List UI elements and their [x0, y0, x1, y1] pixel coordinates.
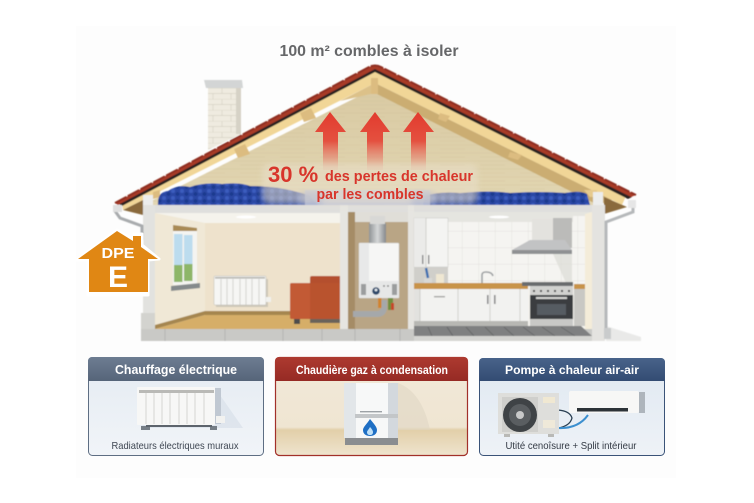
panel header [479, 358, 665, 381]
heat arrows [315, 112, 434, 170]
rafter brackets [371, 78, 378, 94]
gutter right [606, 208, 633, 330]
insulation [158, 183, 590, 205]
base cabinets [414, 289, 528, 326]
soffits [123, 200, 143, 215]
panel: pompe à chaleur air-air [479, 358, 665, 456]
red tiles [115, 66, 636, 205]
DPE badge: E [108, 261, 128, 294]
panel: chaudière gaz à condensation: Chaudière gaz à condensation [296, 365, 448, 377]
gutter left [115, 211, 142, 240]
panel: chauffage électrique: Chauffage électrique [115, 363, 237, 377]
boiler closet [348, 205, 414, 329]
DPE badge: DPE [102, 246, 135, 262]
roof structure [115, 66, 636, 215]
counter [414, 283, 528, 289]
living room [155, 213, 341, 329]
wood fascia [122, 71, 626, 210]
window [171, 225, 200, 291]
caption: Radiateurs électriques muraux [112, 440, 239, 452]
wall cabinets [414, 218, 448, 267]
panel: chauffage électrique [88, 357, 264, 456]
icon: radiator [137, 387, 243, 430]
pipes [352, 298, 394, 314]
icon: boiler with flame [344, 383, 430, 445]
walls and slabs [143, 195, 153, 205]
DPE badge [77, 230, 159, 295]
panel header [275, 357, 468, 381]
house illustration [113, 66, 641, 341]
floor [155, 315, 341, 329]
baseboard [155, 311, 341, 329]
chimney [204, 80, 243, 150]
boiler [359, 243, 399, 298]
stove [522, 282, 573, 326]
flue [369, 223, 386, 245]
panel header [88, 357, 264, 381]
heat loss label [262, 162, 478, 204]
caption: Utité cenoîsure + Split intérieur [506, 440, 637, 452]
dark underlay [119, 68, 632, 206]
floor [414, 326, 592, 336]
title: 100 m² combles à isoler [280, 43, 458, 60]
hood [512, 218, 572, 283]
partition wall [340, 205, 348, 329]
panel: chaudière gaz à condensation [275, 357, 468, 456]
gable wall [153, 88, 595, 205]
heat loss label: par les combles [316, 187, 424, 203]
heat loss label: des pertes de chaleur [325, 169, 473, 185]
radiator [214, 276, 271, 307]
panel: pompe à chaleur air-air: Pompe à chaleur air-air [505, 363, 639, 377]
kitchen [414, 212, 592, 341]
icon: outdoor unit and split [498, 391, 645, 437]
sink [424, 268, 493, 284]
sofa [290, 276, 341, 324]
heat loss label: 30 % [268, 162, 318, 187]
